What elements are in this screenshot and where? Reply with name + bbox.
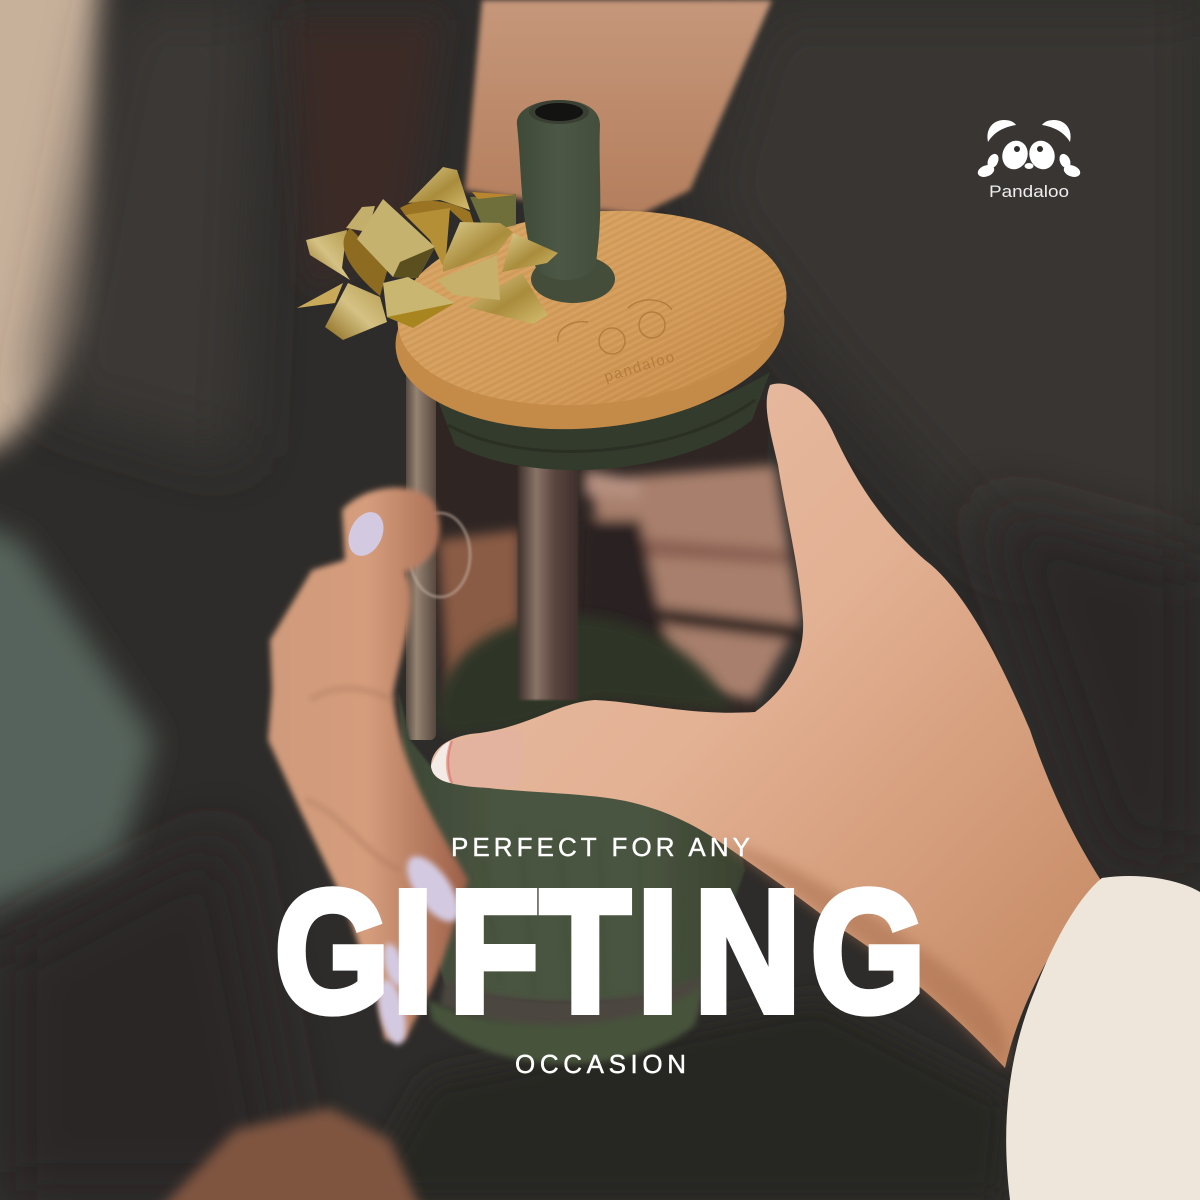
top loop: [408, 167, 470, 210]
inner straw: [518, 465, 578, 700]
lid edge: [387, 219, 793, 445]
ribbon tail: [297, 283, 343, 308]
bottom center loop: [383, 277, 455, 328]
headline line: occasion: OCCASION: [515, 1049, 686, 1079]
silicone straw: [517, 100, 600, 280]
headline: gifting: GIFTING: [275, 856, 925, 1049]
jacket light folds: [40, 0, 260, 460]
bamboo lid: [387, 195, 795, 445]
hair shadow: [290, 20, 440, 290]
headline line: perfect for any: PERFECT FOR ANY: [451, 832, 750, 862]
brand logo: [976, 120, 1082, 201]
left loop: [306, 230, 350, 280]
right bottom tip: [467, 273, 548, 324]
lid top: [389, 195, 795, 421]
hand shading: [720, 842, 1007, 1068]
lilac nails: [342, 506, 469, 1047]
back left loop: [346, 206, 375, 232]
silicone sleeve: [398, 690, 745, 1064]
lid seal: [432, 372, 770, 470]
gold bow: [297, 167, 558, 340]
chest skin: [465, 0, 772, 215]
panda face: [976, 120, 1082, 179]
center right loop: [443, 222, 513, 272]
engraved logo: [558, 300, 678, 386]
center lower loop: [437, 255, 500, 300]
blurred sage cushion: [0, 510, 155, 930]
engraved logo: pandaloo: [602, 348, 678, 386]
big center loop: [357, 199, 435, 278]
sleeve ribs: [480, 830, 680, 1000]
right tip: [502, 233, 558, 272]
lower glass band: [440, 975, 705, 1033]
jar olive reflection: [435, 615, 735, 735]
blurred backdrop wall: [0, 0, 100, 470]
far hand behind glass: [430, 400, 800, 735]
left glass highlight: [406, 365, 436, 740]
right hand: [431, 383, 1102, 1068]
left hand: [268, 488, 469, 1047]
brand name: Pandaloo: [989, 182, 1069, 201]
lower green base: [428, 985, 702, 1064]
thumb nail: [431, 729, 523, 788]
glass jar: [406, 365, 578, 740]
green washer: [531, 255, 615, 303]
cream sleeve: [1006, 876, 1200, 1200]
left bottom loop: [325, 283, 387, 340]
back right loop: [470, 194, 516, 232]
blurred foreground hand: [150, 1108, 425, 1200]
glass ring reflection: [410, 513, 470, 597]
